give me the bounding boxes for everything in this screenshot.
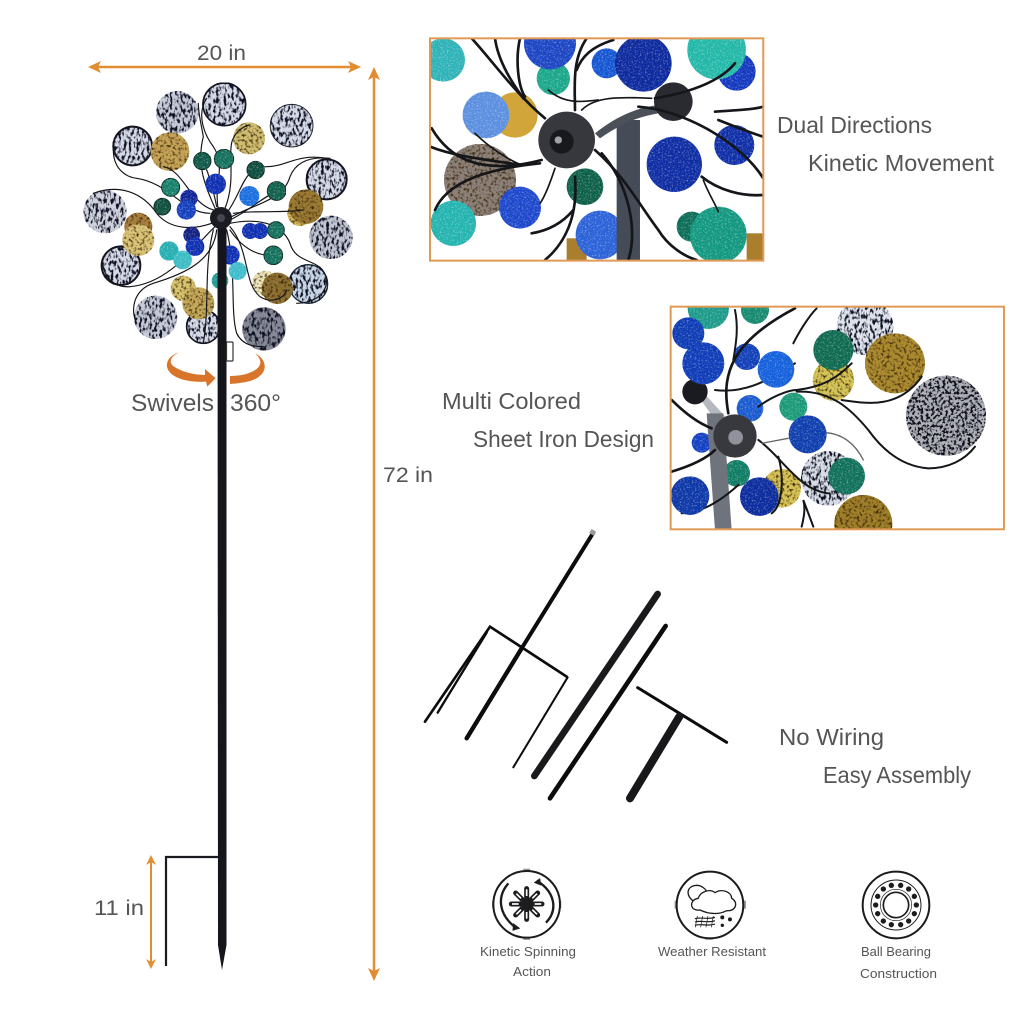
text block: no wiring	[779, 724, 971, 788]
icon label: ball bearing construction: Construction	[860, 966, 937, 981]
part: threaded rod	[550, 626, 666, 798]
swivel label left: Swivels	[131, 390, 214, 417]
text block: dual directions: Kinetic Movement	[808, 150, 995, 176]
icon label: ball bearing construction: Ball Bearing	[861, 944, 931, 959]
spinner: pole, hub and ground stake	[166, 207, 233, 970]
exploded view: stake and pole parts	[425, 529, 727, 798]
icon: weather resistant	[675, 872, 746, 940]
panel: multi colored close-up photo	[670, 306, 1005, 530]
text block: multi colored: Sheet Iron Design	[473, 426, 654, 452]
icon label: kinetic spinning action	[480, 944, 576, 979]
part: T-bar	[630, 688, 727, 798]
dimension arrow: height 72 in	[368, 67, 380, 981]
icon: ball bearing	[863, 872, 929, 938]
dimension label: 72 in: 72 in	[383, 464, 433, 487]
icon label: kinetic spinning action: Action	[513, 964, 551, 979]
dimension label: 11 in: 11 in	[94, 897, 144, 920]
text block: dual directions	[777, 112, 995, 176]
part: long rod	[534, 594, 658, 776]
dimension arrow: stake 11 in	[146, 855, 156, 969]
icon label: kinetic spinning action: Kinetic Spinning	[480, 944, 576, 959]
silver outer discs	[83, 83, 353, 351]
text block: no wiring: No Wiring	[779, 724, 884, 750]
text block: multi colored	[442, 388, 654, 452]
text block: multi colored: Multi Colored	[442, 388, 581, 414]
teal discs	[159, 241, 247, 289]
dimension label: 20 in: 20 in	[197, 42, 246, 65]
icon label: weather resistant: Weather Resistant	[658, 944, 766, 959]
wires	[93, 98, 330, 347]
dimension arrow: width 20 in	[88, 61, 361, 73]
panel: dual directions close-up photo	[429, 37, 764, 262]
icon label: ball bearing construction	[860, 944, 937, 981]
gold discs	[122, 122, 323, 319]
swivel arrows	[167, 352, 265, 387]
text block: dual directions: Dual Directions	[777, 112, 932, 138]
text block: no wiring: Easy Assembly	[823, 762, 971, 788]
part: fork stake	[425, 529, 596, 767]
spinner: pinwheel head with coloured discs	[83, 83, 353, 351]
green discs	[154, 149, 286, 265]
icon: kinetic spinning	[492, 869, 561, 940]
swivel label right: 360°	[230, 390, 281, 417]
blue discs	[177, 174, 268, 265]
